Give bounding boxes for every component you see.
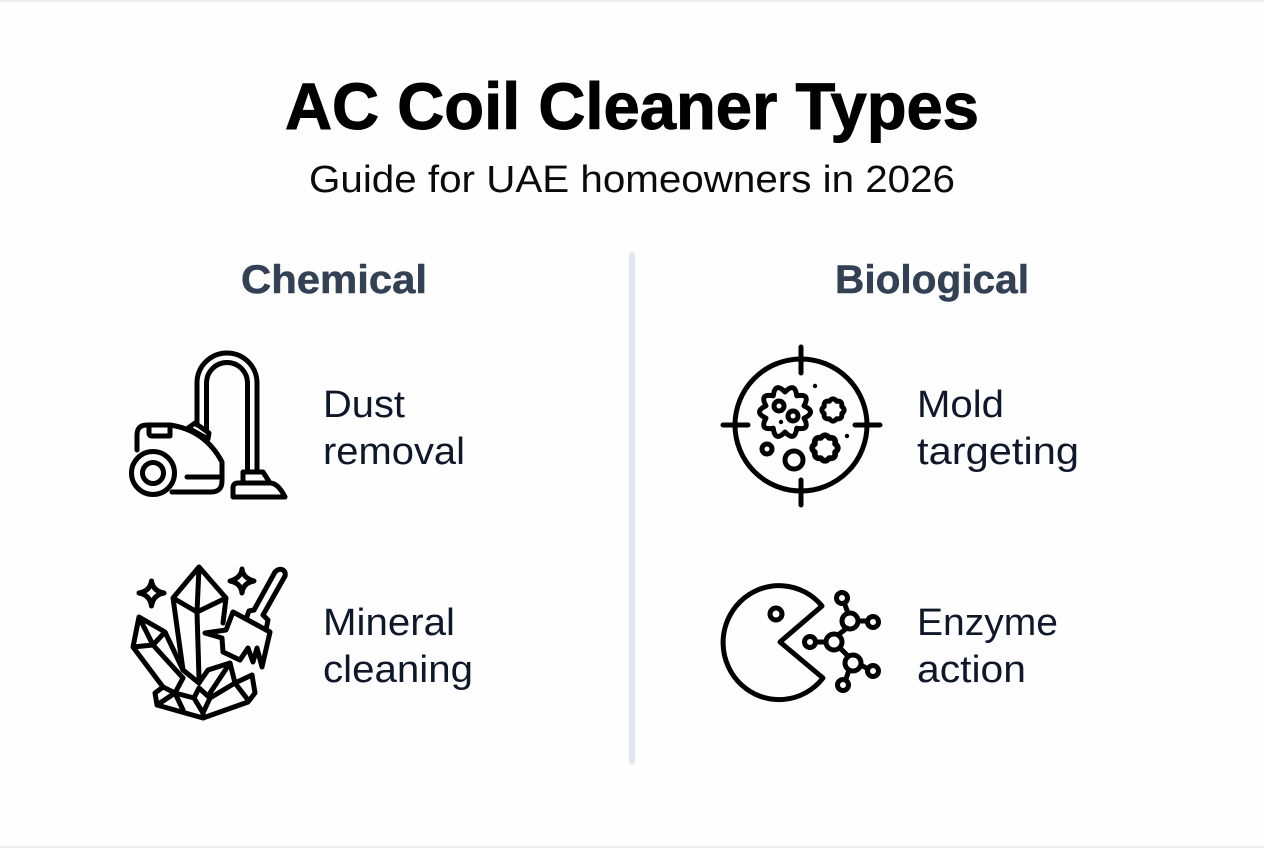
panel: chemical (132, 258, 473, 718)
item label: mineral cleaning: cleaning (323, 649, 473, 691)
panel: biological (723, 258, 1079, 700)
title: AC Coil Cleaner Types (285, 69, 979, 143)
heading: biological: Biological (835, 258, 1029, 302)
item label: mold targeting: Mold (917, 384, 1004, 426)
item label: dust removal: Dust (323, 384, 405, 426)
item label: enzyme action: Enzyme (917, 602, 1058, 644)
icon: crystals and broom (133, 567, 285, 718)
item label: mineral cleaning (323, 602, 473, 691)
column divider (629, 252, 635, 765)
item label: enzyme action (917, 602, 1058, 691)
item label: dust removal (323, 384, 465, 473)
item label: mold targeting: targeting (917, 431, 1079, 473)
item label: mold targeting (917, 384, 1079, 473)
item label: dust removal: removal (323, 431, 465, 473)
item label: mineral cleaning: Mineral (323, 602, 455, 644)
icon: vacuum cleaner (132, 353, 285, 497)
icon: mold target (723, 347, 880, 505)
item label: enzyme action: action (917, 649, 1026, 691)
heading: chemical: Chemical (241, 258, 427, 302)
subtitle: Guide for UAE homeowners in 2026 (309, 159, 955, 201)
icon: enzyme eating molecule (723, 586, 878, 700)
